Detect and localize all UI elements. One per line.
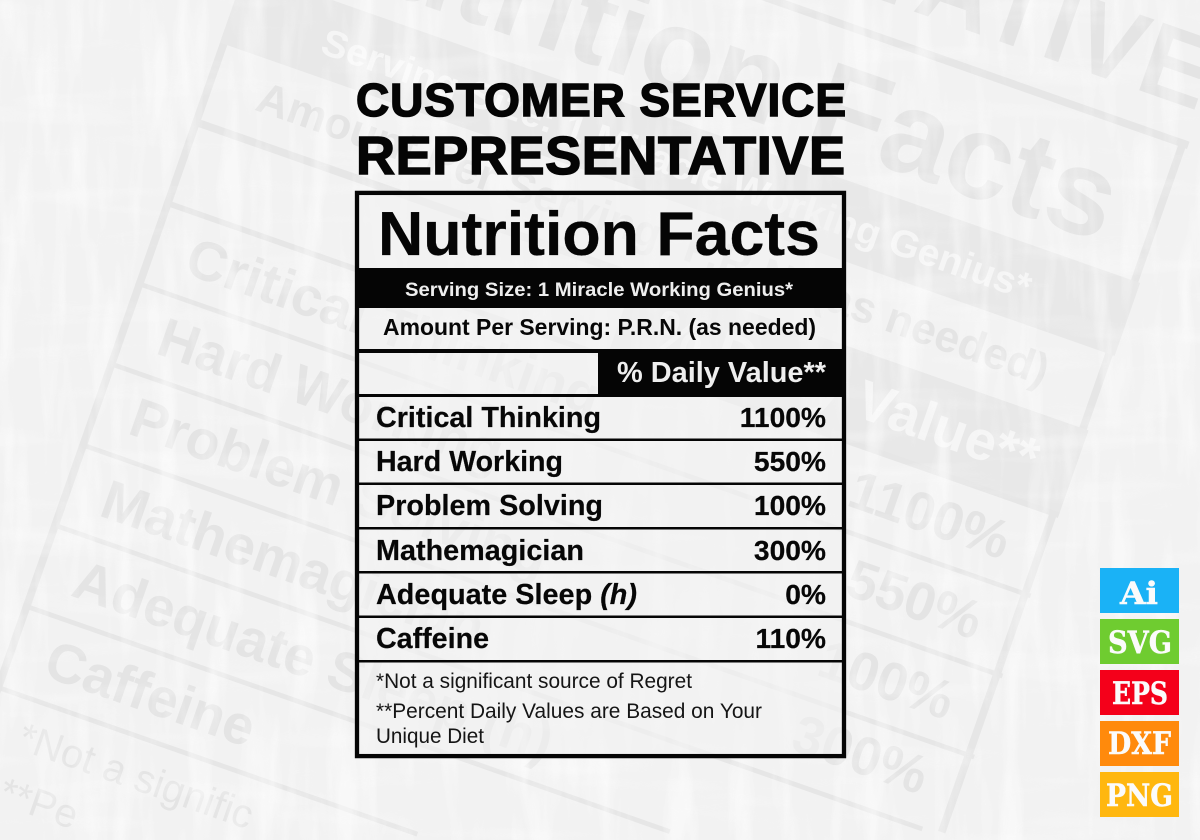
row: mathemagician: 300% <box>754 534 826 566</box>
row: hard working: 550% <box>754 445 826 477</box>
ghost label text: 300% <box>785 703 936 806</box>
ghost label text: Critical Thinking <box>178 226 609 428</box>
daily value header: % Daily Value** <box>617 357 827 389</box>
row: adequate sleep <box>355 578 846 618</box>
ghost label text: Adequate Sleep (h) <box>65 548 561 773</box>
daily value header <box>355 349 846 397</box>
row: adequate sleep: Adequate Sleep (h) <box>376 579 637 611</box>
ghost label text: Caffeine <box>37 628 264 759</box>
row: critical thinking <box>355 401 846 441</box>
serving size bar <box>355 268 846 308</box>
row: hard working <box>355 445 846 485</box>
ghost label text: Problem Solving <box>122 386 556 589</box>
ghost label text: Hard Working <box>150 306 512 484</box>
ghost label text: 550% <box>839 548 990 651</box>
ghost label text: *Not a signific <box>13 714 259 838</box>
badge: PNG: PNG <box>1106 778 1173 814</box>
badge: EPS <box>1100 670 1179 715</box>
ghost label text: Mathemagician <box>94 468 493 659</box>
row: critical thinking: Critical Thinking <box>376 402 601 434</box>
row: caffeine: 110% <box>755 622 826 654</box>
ghost label text: 1100% <box>841 459 1018 571</box>
ghost label text: 100% <box>811 628 962 732</box>
row: problem solving: 100% <box>754 489 826 521</box>
badge: Ai: Ai <box>1119 576 1158 612</box>
footnotes: *Not a significant source of Regret <box>376 670 692 693</box>
row: caffeine: Caffeine <box>376 623 489 655</box>
title: CUSTOMER SERVICE <box>356 74 846 126</box>
row: mathemagician: Mathemagician <box>376 535 584 567</box>
format badges <box>1100 568 1179 817</box>
badge: EPS: EPS <box>1112 676 1168 712</box>
ghost title <box>300 0 1200 133</box>
row: caffeine <box>355 622 846 662</box>
title <box>356 74 846 186</box>
panel: nutrition facts label <box>355 193 846 756</box>
label frame <box>357 193 844 756</box>
footnotes: **Percent Daily Values are Based on Your <box>376 700 762 723</box>
footnotes <box>376 670 762 748</box>
row: critical thinking: 1100% <box>740 401 826 433</box>
title: REPRESENTATIVE <box>356 126 845 186</box>
row: hard working: Hard Working <box>376 446 563 478</box>
heading: nutrition facts: Nutrition Facts <box>378 199 820 269</box>
badge: SVG: SVG <box>1108 625 1172 661</box>
ghost label text: Amount Per Serving: P.R.N. (as needed) <box>250 73 1056 395</box>
badge: DXF: DXF <box>1108 726 1171 762</box>
row: adequate sleep: 0% <box>785 578 826 610</box>
amount per serving row: Amount Per Serving: P.R.N. (as needed) <box>383 314 816 340</box>
footnotes: Unique Diet <box>376 725 484 748</box>
row: problem solving: Problem Solving <box>376 490 603 522</box>
serving size bar: Serving Size: 1 Miracle Working Genius* <box>405 279 793 301</box>
row: problem solving <box>355 489 846 530</box>
ghost label text: % Daily Value** <box>646 297 1048 489</box>
badge: Ai <box>1100 568 1179 613</box>
row: mathemagician <box>355 534 846 574</box>
ghost label text: Serving Size: 1 Miracle Working Genius* <box>316 21 1037 309</box>
